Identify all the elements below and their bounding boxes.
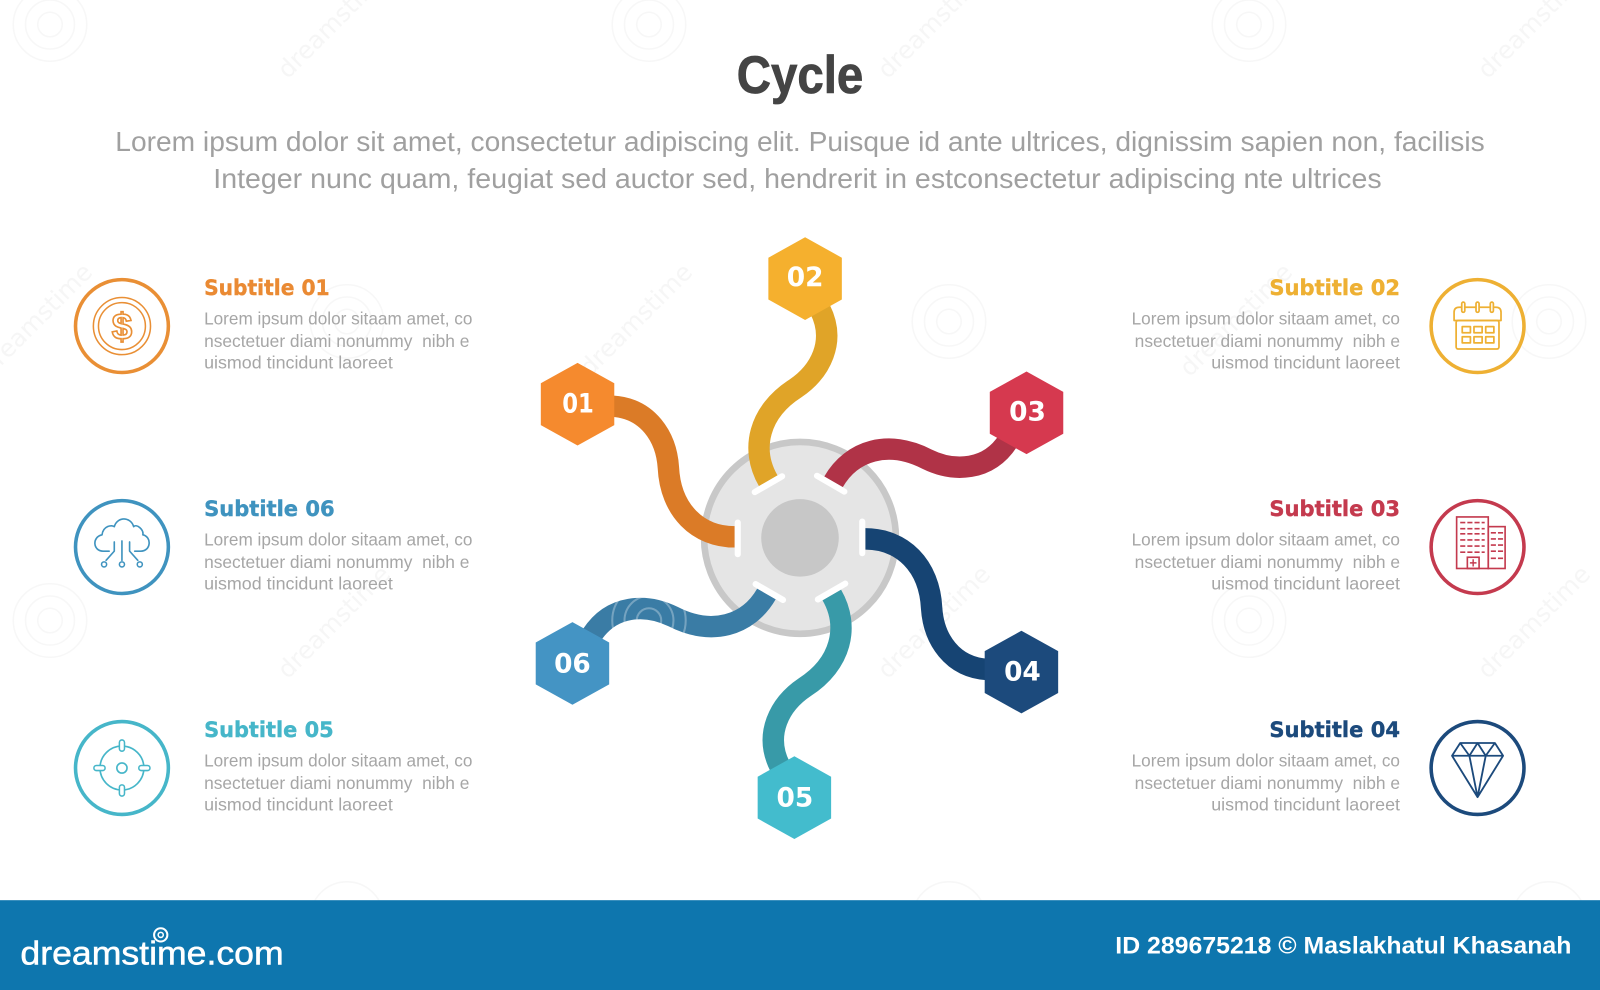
icon: diamond [1431,722,1524,814]
watermark background: dreamstime [871,559,996,684]
panel: subtitle 02: Subtitle 02 [1269,276,1400,301]
panel: subtitle 02: uismod tincidunt laoreet [1211,352,1400,372]
panel: subtitle 02 [1132,276,1524,373]
hexagon 06: 06 [554,649,591,680]
panel: subtitle 02: Lorem ipsum dolor sitaam amet, co [1132,309,1400,329]
panel: subtitle 03: Lorem ipsum dolor sitaam amet, co [1132,530,1400,550]
watermark background: dreamstime [1471,559,1596,684]
panel: subtitle 06 [76,497,473,593]
panel: subtitle 04 [1132,718,1524,814]
hexagon 02: 02 [787,262,823,293]
icon: target [76,722,168,814]
panel: subtitle 05 [76,718,473,814]
panel: subtitle 01 [76,276,473,373]
panel: subtitle 06: nsectetuer diami nonummy nibh e [204,552,469,572]
connector 03 [834,376,1008,547]
panel: subtitle 04: Lorem ipsum dolor sitaam amet, co [1132,750,1400,770]
connector 01 [612,406,735,537]
footer logo: dreamstime.com [20,935,284,972]
panel: subtitle 05: Subtitle 05 [204,718,334,743]
panel: subtitle 03: uismod tincidunt laoreet [1211,573,1400,593]
panel: subtitle 04: nsectetuer diami nonummy nibh e [1135,773,1400,793]
panel: subtitle 01: Lorem ipsum dolor sitaam amet, co [204,309,473,329]
panel: subtitle 01: nsectetuer diami nonummy nibh e [204,331,469,351]
hexagon 03: 03 [1009,396,1046,427]
hexagon 03 [990,372,1063,454]
intro text: Lorem ipsum dolor sit amet, consectetur adipiscing elit. Puisque id ante ultrices, dignissim sapien non, facilisis [115,126,1485,157]
connector 04 [865,539,988,670]
connector 02 [707,309,881,481]
panel: subtitle 04: Subtitle 04 [1269,718,1400,743]
icon: office building [1431,501,1524,593]
hexagon 02 [768,237,842,320]
panel: subtitle 03: nsectetuer diami nonummy nibh e [1135,552,1400,572]
watermark background: dreamstime [271,559,396,684]
connector 06 [592,529,766,700]
hexagon 06 [536,622,609,705]
panel: subtitle 02: nsectetuer diami nonummy nibh e [1135,331,1400,351]
intro text [115,126,1485,194]
icon: cloud network [76,501,168,593]
footer bar [0,900,1600,990]
title: Cycle [737,46,863,105]
panel: subtitle 06: Lorem ipsum dolor sitaam amet, co [204,530,473,550]
panel: subtitle 01: Subtitle 01 [204,276,330,301]
connector 05 [719,595,893,766]
hexagon 01 [541,363,614,446]
watermark background: dreamstime [574,257,698,382]
panel: subtitle 05: nsectetuer diami nonummy nibh e [204,773,469,793]
icon: dollar coin [76,280,168,373]
central hub [704,442,896,634]
hexagon 04 [985,631,1058,713]
hub ticks [738,476,862,600]
panel: subtitle 03: Subtitle 03 [1269,497,1400,522]
panel: subtitle 01: uismod tincidunt laoreet [204,352,393,372]
panel: subtitle 03 [1132,497,1524,593]
watermark over diagram [612,584,686,657]
intro text: Integer nunc quam, feugiat sed auctor sed, hendrerit in estconsectetur adipiscing nte ultrices [213,163,1382,194]
panel: subtitle 05: Lorem ipsum dolor sitaam amet, co [204,750,473,770]
hexagon 05 [758,756,831,839]
panel: subtitle 06: Subtitle 06 [204,497,335,522]
icon: calendar [1431,280,1524,373]
hexagon 05: 05 [777,782,813,813]
watermark background: dreamstime [1174,257,1298,382]
panel: subtitle 05: uismod tincidunt laoreet [204,794,393,814]
footer credit: ID 289675218 © Maslakhatul Khasanah [1115,932,1571,959]
hexagon 01: 01 [562,388,594,419]
hexagon 04: 04 [1004,657,1041,688]
panel: subtitle 04: uismod tincidunt laoreet [1211,794,1400,814]
panel: subtitle 06: uismod tincidunt laoreet [204,573,393,593]
icon: dollar coin: $ [112,306,132,347]
